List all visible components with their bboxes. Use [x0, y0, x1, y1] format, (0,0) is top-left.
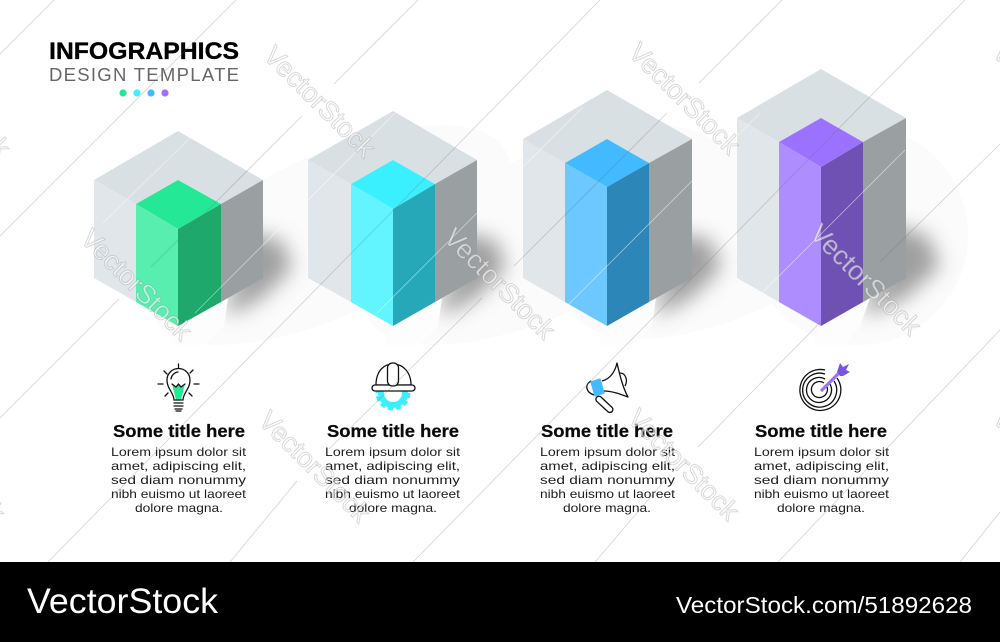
- panel text: column 2: Some title here: [327, 421, 459, 441]
- text: VectorStock: [622, 403, 745, 527]
- panel text: column 4: nibh euismo ut laoreet: [754, 487, 890, 501]
- box 1: green: [94, 131, 263, 326]
- panel text: column 4: [754, 421, 890, 515]
- text: VectorStock: [75, 223, 198, 347]
- text: VectorStock: [253, 405, 376, 529]
- footer bar: VectorStock.com/51892628: [676, 592, 972, 618]
- text: VectorStock: [438, 222, 561, 346]
- panel text: column 2: [325, 421, 461, 515]
- panel text: column 3: nibh euismo ut laoreet: [540, 487, 676, 501]
- panel text: column 4: dolore magna.: [777, 501, 865, 515]
- shadow notches: [170, 298, 870, 345]
- panel text: column 3: amet, adipiscing elit,: [540, 459, 675, 473]
- footer bar: [0, 562, 1000, 642]
- text: VectorStock: [258, 40, 381, 164]
- panel text: column 3: Lorem ipsum dolor sit: [540, 445, 676, 459]
- panel text: column 4: Lorem ipsum dolor sit: [754, 445, 890, 459]
- panel text: column 2: nibh euismo ut laoreet: [325, 487, 461, 501]
- panel text: column 4: amet, adipiscing elit,: [754, 459, 889, 473]
- title: DESIGN TEMPLATE: [49, 64, 239, 85]
- title: [49, 38, 239, 85]
- panel text: column 2: sed diam nonummy: [325, 473, 460, 487]
- panel text: column 1: dolore magna.: [135, 501, 223, 515]
- panel text: column 3: dolore magna.: [563, 501, 651, 515]
- panel text: column 1: amet, adipiscing elit,: [111, 459, 246, 473]
- pale background shadows: [119, 80, 968, 390]
- icon: megaphone: [587, 363, 628, 414]
- legend dots: [119, 89, 169, 97]
- icon: target with arrow: [800, 363, 850, 410]
- panel text: column 1: nibh euismo ut laoreet: [111, 487, 247, 501]
- box 3: blue: [523, 90, 692, 326]
- icon: light bulb: [158, 364, 199, 411]
- icon: hard hat with gear: [370, 363, 416, 408]
- panel text: column 4: Some title here: [755, 421, 887, 441]
- box 2: cyan: [308, 111, 477, 326]
- text: VectorStock: [804, 218, 927, 342]
- panel text: column 1: [111, 421, 247, 515]
- panel text: column 1: Some title here: [113, 421, 245, 441]
- panel text: column 2: Lorem ipsum dolor sit: [325, 445, 461, 459]
- soft cast shadows: [228, 222, 940, 316]
- title: INFOGRAPHICS: [49, 38, 239, 65]
- panel text: column 2: amet, adipiscing elit,: [325, 459, 460, 473]
- panel text: column 1: sed diam nonummy: [111, 473, 246, 487]
- panel text: column 1: Lorem ipsum dolor sit: [111, 445, 247, 459]
- box 4: purple: [737, 69, 906, 326]
- panel text: column 3: sed diam nonummy: [540, 473, 675, 487]
- footer bar: VectorStock: [27, 582, 219, 621]
- panel text: column 4: sed diam nonummy: [754, 473, 889, 487]
- text: VectorStock: [623, 37, 746, 161]
- panel text: column 3: [540, 421, 676, 515]
- panel text: column 3: Some title here: [541, 421, 673, 441]
- panel text: column 2: dolore magna.: [349, 501, 437, 515]
